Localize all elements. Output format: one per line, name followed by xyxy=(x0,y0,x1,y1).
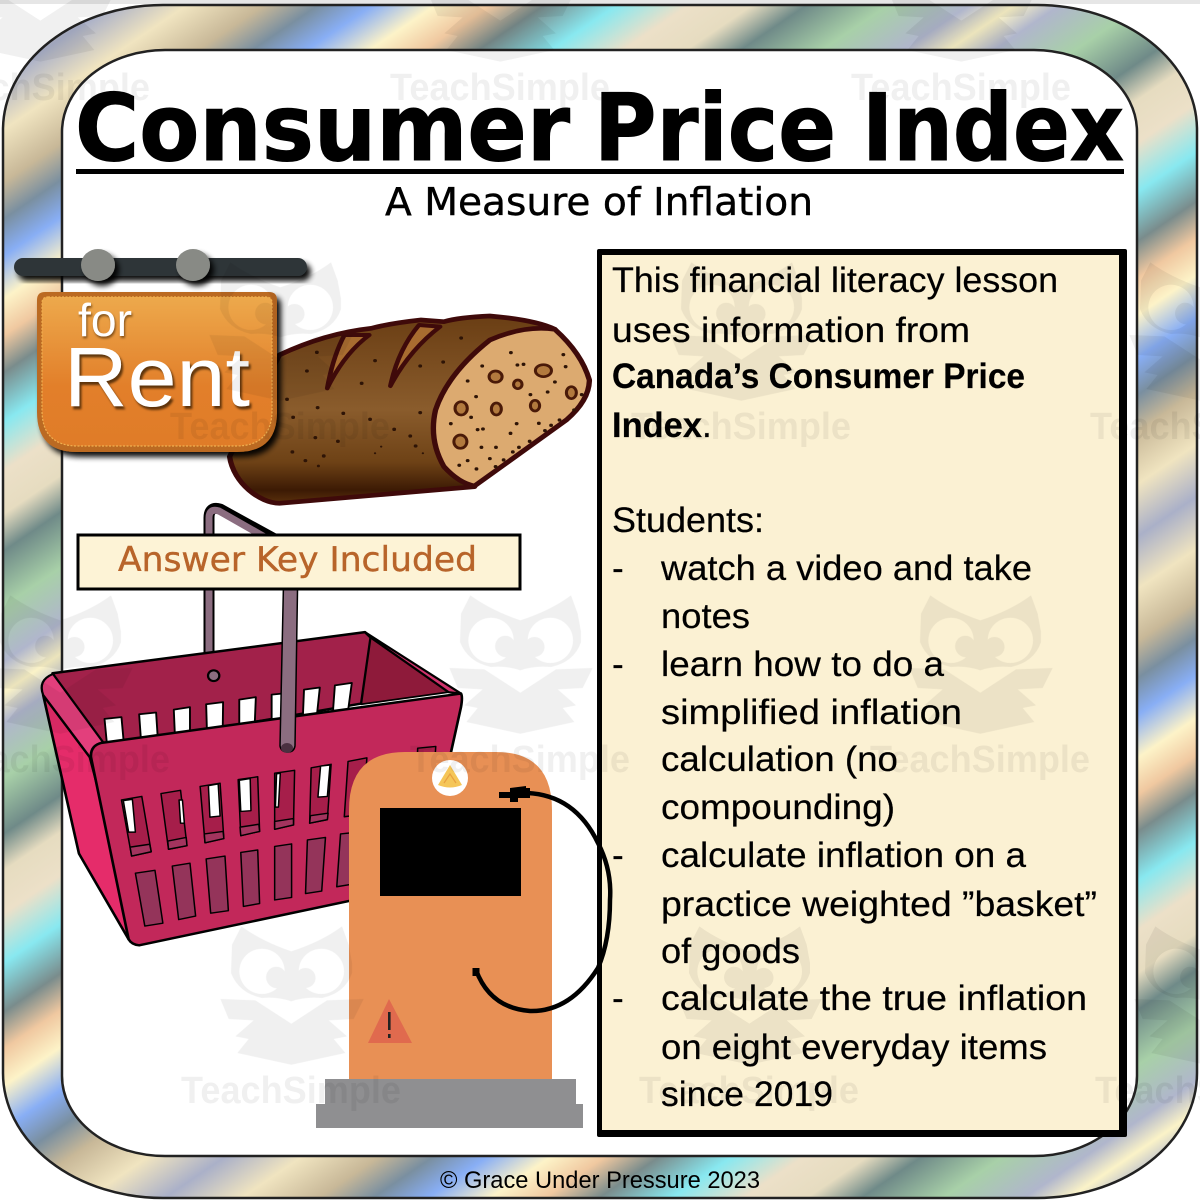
student task list: on eight everyday items xyxy=(661,1028,1047,1067)
page edge strip xyxy=(0,0,1200,4)
label: answer key included: Answer Key Included xyxy=(118,540,477,580)
bread crumbs xyxy=(449,351,584,471)
intro text: Students: xyxy=(612,501,764,540)
bread cut face xyxy=(433,328,589,486)
panel fill xyxy=(602,255,1119,1130)
student task list: learn how to do a xyxy=(661,645,945,684)
bread cuts xyxy=(327,325,440,388)
student task list: - xyxy=(612,645,624,684)
student task list xyxy=(612,549,1097,1114)
student task list: practice weighted ”basket” xyxy=(661,885,1097,924)
bread air holes xyxy=(454,365,576,448)
pump logo xyxy=(432,760,468,796)
watermark wordmarks: TeachSimple xyxy=(631,406,851,448)
watermark wordmarks: TeachSimple xyxy=(639,1070,859,1112)
pump hose xyxy=(476,786,610,1011)
student task list: calculation (no xyxy=(661,740,898,779)
basket left rim xyxy=(42,674,103,757)
title: Price xyxy=(594,74,836,182)
student task list: of goods xyxy=(661,932,800,971)
student task list: notes xyxy=(661,597,750,636)
bread crust xyxy=(230,316,555,503)
pump body xyxy=(349,752,552,1079)
subtitle: A Measure of Inflation xyxy=(385,180,813,224)
sign board face xyxy=(42,297,272,446)
watermark wordmarks: TeachSimple xyxy=(870,739,1090,781)
intro text: Canada’s Consumer Price xyxy=(612,357,1025,396)
student task list: - xyxy=(612,549,624,588)
illustration: basket front handle xyxy=(280,560,298,753)
sign word: Rent: Rent xyxy=(64,330,250,424)
title xyxy=(75,74,1124,182)
illustration: bread loaf xyxy=(230,316,589,503)
illustration: shopping basket xyxy=(42,632,462,945)
basket back slots xyxy=(105,683,352,746)
bread speckles xyxy=(285,336,463,467)
intro text: This financial literacy lesson xyxy=(612,261,1058,300)
basket front panel xyxy=(91,694,462,945)
sign hanging knobs xyxy=(81,249,210,281)
basket upper front slots xyxy=(121,746,436,856)
student task list: calculate inflation on a xyxy=(661,836,1027,875)
watermark wordmarks: TeachSimple xyxy=(181,1070,401,1112)
student task list: - xyxy=(612,836,624,875)
student task list: watch a video and take xyxy=(660,549,1032,588)
student task list: - xyxy=(612,979,624,1018)
front handle knob xyxy=(281,743,293,753)
illustration: basket back handle xyxy=(209,508,291,660)
student task list: calculate the true inflation xyxy=(661,979,1087,1018)
watermark wordmarks: TeachSimple xyxy=(390,67,610,109)
copyright footer: © Grace Under Pressure 2023 xyxy=(440,1167,760,1194)
basket left side xyxy=(43,695,139,945)
illustration: gas pump xyxy=(316,752,583,1128)
sign word: for: for xyxy=(78,294,132,346)
student task list: since 2019 xyxy=(661,1075,833,1114)
pump base xyxy=(316,1079,583,1128)
student task list: compounding) xyxy=(661,788,895,827)
title underline xyxy=(76,169,1124,174)
watermark wordmarks: TeachSimple xyxy=(410,739,630,781)
basket rear handle eyelet xyxy=(208,670,219,681)
panel border xyxy=(597,249,1127,1137)
student task list: simplified inflation xyxy=(661,693,962,732)
title: Index xyxy=(862,74,1124,182)
title: Consumer xyxy=(75,74,570,182)
basket right inner wall xyxy=(361,637,449,704)
pump screen xyxy=(380,808,521,896)
basket right rim highlight xyxy=(365,632,461,694)
intro text: uses information from xyxy=(612,311,970,350)
intro text xyxy=(612,261,1058,540)
label: answer key included xyxy=(78,535,520,589)
illustration: for rent sign xyxy=(14,249,307,452)
intro text: Index xyxy=(612,406,703,445)
basket back wall xyxy=(53,632,371,750)
hose nozzle xyxy=(499,786,530,802)
basket lower front slots xyxy=(135,832,357,926)
intro text: . xyxy=(702,406,712,445)
description panel xyxy=(597,249,1127,1137)
pump warning sign xyxy=(368,999,412,1043)
watermark wordmarks: TeachSimple xyxy=(170,406,390,448)
watermark wordmarks: TeachSimple xyxy=(851,67,1071,109)
sign hanging bar xyxy=(14,258,307,276)
sign board xyxy=(37,292,277,452)
